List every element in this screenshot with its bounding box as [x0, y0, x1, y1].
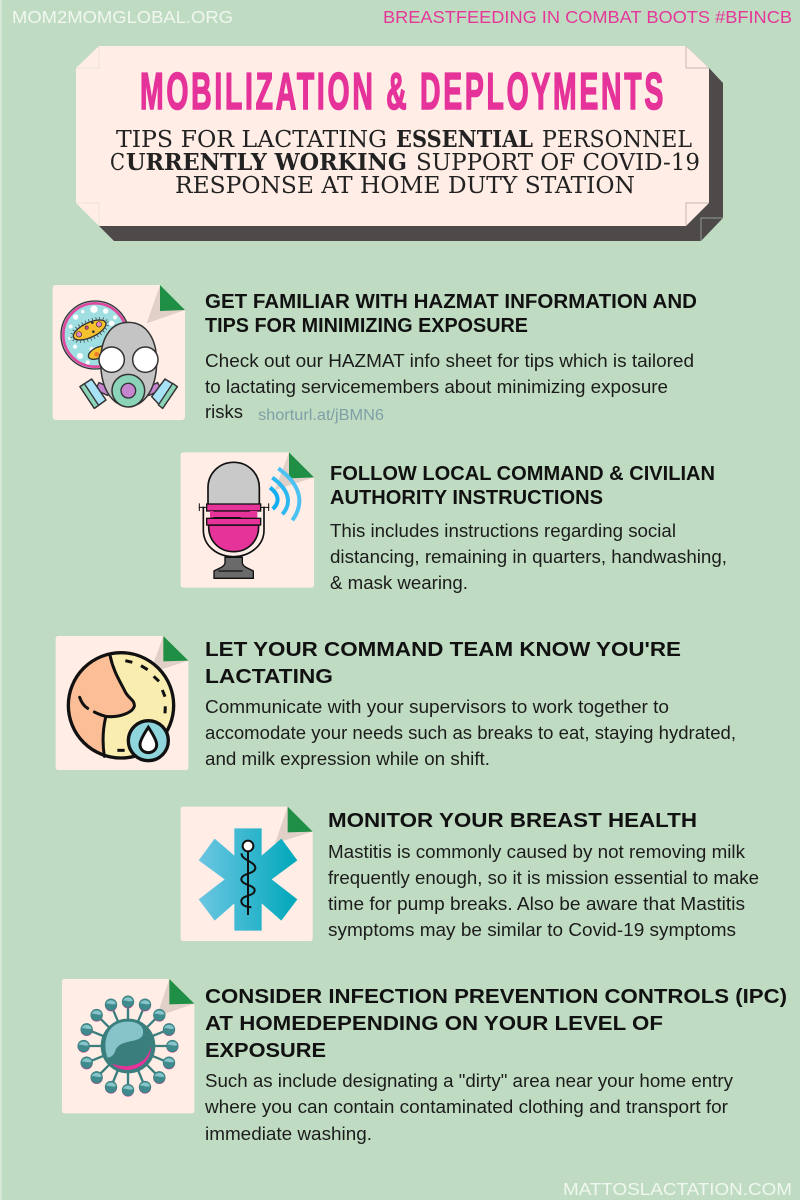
- body text: accomodate your needs such as breaks to eat, staying hydrated,: [205, 723, 736, 743]
- subtitle: [110, 125, 700, 199]
- heading: CONSIDER INFECTION PREVENTION CONTROLS (IPC): [205, 985, 787, 1008]
- card with virus icon: [62, 979, 194, 1113]
- footer label: mattoslactation.com: MATTOSLACTATION.COM: [563, 1179, 792, 1199]
- subtitle: TIPS FOR LACTATING: [116, 125, 387, 153]
- panel: local authority tip: [181, 452, 727, 593]
- body text: to lactating servicemembers about minimizing exposure: [205, 377, 668, 397]
- body text: time for pump breaks. Also be aware that Mastitis: [328, 894, 745, 914]
- body text: frequently enough, so it is mission essential to make: [328, 868, 759, 888]
- panel: title banner: [76, 46, 723, 241]
- heading: FOLLOW LOCAL COMMAND & CIVILIAN: [330, 462, 715, 485]
- body text: [205, 351, 694, 422]
- heading: GET FAMILIAR WITH HAZMAT INFORMATION AND: [205, 290, 697, 313]
- subtitle: URRENTLY WORKING: [126, 148, 407, 176]
- subtitle: SUPPORT OF COVID-19: [416, 148, 700, 176]
- heading: AT HOMEDEPENDING ON YOUR LEVEL OF: [205, 1012, 663, 1035]
- body text: [205, 697, 736, 769]
- body text: [204, 1071, 733, 1144]
- card with breast icon: [56, 636, 188, 770]
- card with star of life icon: [181, 807, 313, 941]
- link: shorturl.at/jBMN6: [258, 407, 384, 424]
- body text: [328, 842, 759, 940]
- banner shadow: [99, 46, 723, 241]
- body text: immediate washing.: [205, 1124, 372, 1144]
- campaign label: breastfeeding in combat boots: BREASTFEEDING IN COMBAT BOOTS #BFINCB: [383, 7, 792, 27]
- panel: breast health tip: [181, 807, 759, 941]
- heading: [330, 462, 715, 509]
- body text: distancing, remaining in quarters, handwashing,: [330, 547, 727, 567]
- heading: AUTHORITY INSTRUCTIONS: [330, 486, 603, 509]
- body text: where you can contain contaminated clothing and transport for: [204, 1097, 728, 1117]
- heading: LACTATING: [205, 665, 333, 688]
- card with microphone icon: [181, 452, 314, 588]
- heading: [205, 985, 787, 1062]
- subtitle: ESSENTIAL: [396, 125, 533, 153]
- heading: EXPOSURE: [205, 1039, 326, 1062]
- heading: LET YOUR COMMAND TEAM KNOW YOU'RE: [205, 638, 681, 661]
- body text: Such as include designating a "dirty" area near your home entry: [205, 1071, 733, 1091]
- body text: This includes instructions regarding social: [330, 521, 676, 541]
- card with gas mask icon: [53, 285, 185, 420]
- banner body: [76, 46, 709, 226]
- body text: symptoms may be similar to Covid-19 symptoms: [328, 920, 736, 940]
- body text: risks: [205, 402, 243, 422]
- panel: command team tip: [56, 636, 736, 770]
- site label: mom2momglobal.org: MOM2MOMGLOBAL.ORG: [12, 7, 233, 27]
- heading: TIPS FOR MINIMIZING EXPOSURE: [205, 314, 528, 337]
- body text: Check out our HAZMAT info sheet for tips which is tailored: [205, 351, 694, 371]
- panel: hazmat tip: [53, 285, 697, 424]
- heading: [205, 290, 697, 337]
- subtitle: PERSONNEL: [542, 125, 692, 153]
- heading: [205, 638, 681, 688]
- body text: Mastitis is commonly caused by not removing milk: [328, 842, 746, 862]
- panel: infection prevention tip: [62, 979, 787, 1144]
- body text: & mask wearing.: [330, 573, 468, 593]
- subtitle: RESPONSE AT HOME DUTY STATION: [175, 171, 635, 199]
- body text: Communicate with your supervisors to work together to: [205, 697, 669, 717]
- body text: and milk expression while on shift.: [205, 749, 490, 769]
- body text: [330, 521, 727, 593]
- heading: MONITOR YOUR BREAST HEALTH: [328, 809, 697, 832]
- subtitle: C: [110, 148, 125, 176]
